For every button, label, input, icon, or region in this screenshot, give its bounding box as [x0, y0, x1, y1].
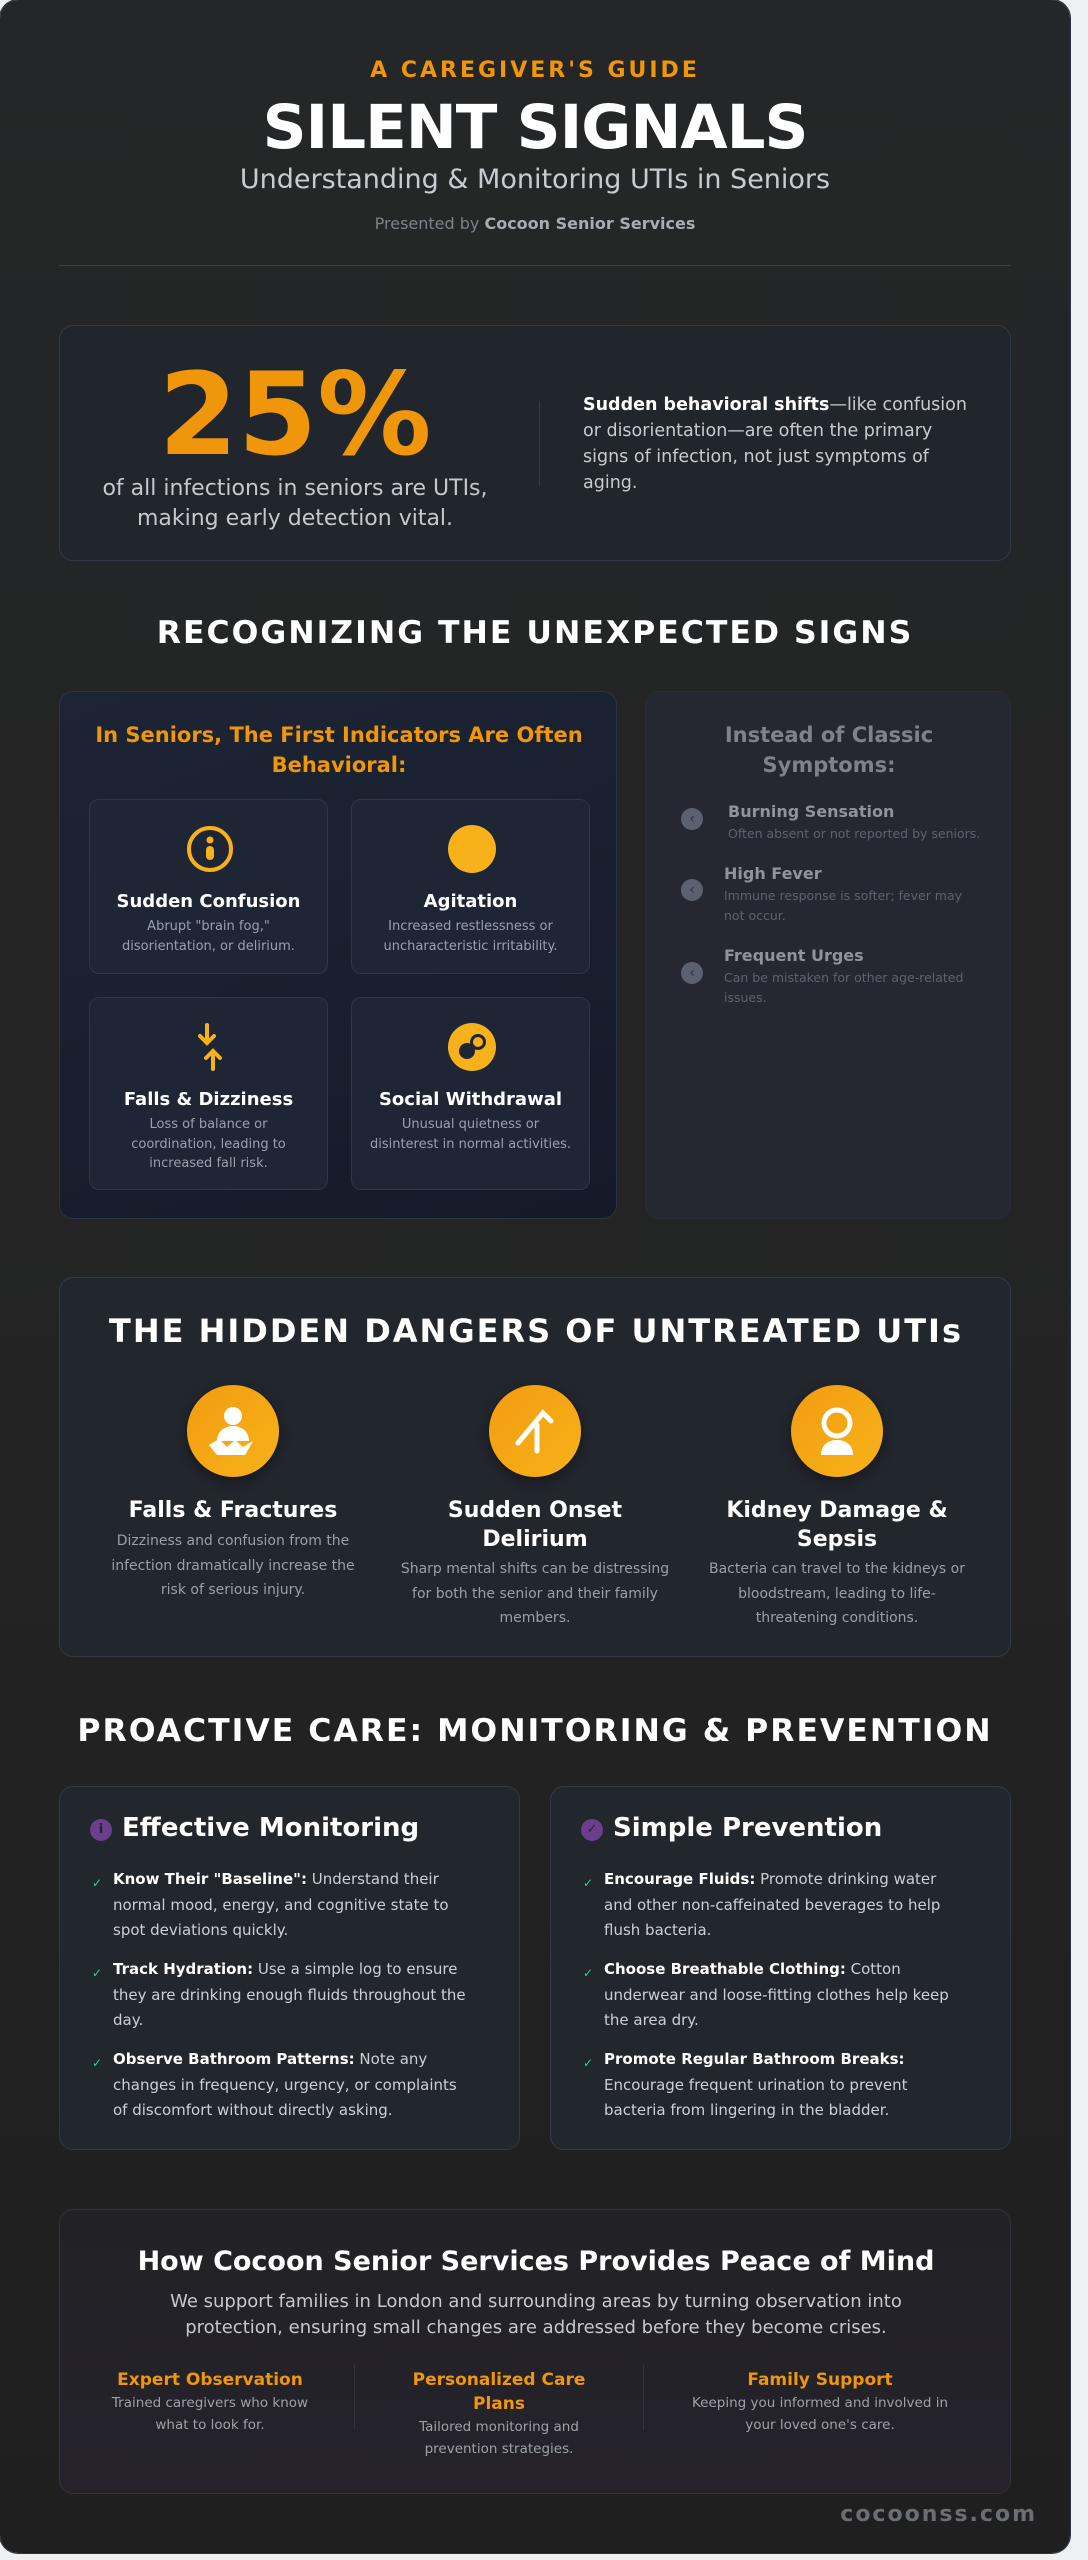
heading: How Cocoon Senior Services Provides Peace of Mind	[138, 2246, 934, 2277]
panel heading	[725, 723, 933, 777]
item: fever	[681, 864, 962, 923]
icon: info	[187, 826, 233, 872]
danger: falls: Falls & Fractures	[129, 1498, 337, 1523]
panel: monitoring: ✓	[92, 1966, 102, 1980]
panel: classic symptoms	[645, 691, 1011, 1219]
danger: kidney: Sepsis	[797, 1527, 877, 1552]
column: personalized: Plans	[473, 2394, 525, 2414]
column: family: your loved one's care.	[745, 2417, 895, 2433]
heading: Simple Prevention	[613, 1813, 882, 1843]
icon: withdrawal	[448, 1023, 496, 1071]
card: sudden confusion: disorientation, or delirium.	[122, 938, 295, 954]
item: Choose Breathable Clothing: Cotton underwear and loose-fitting clothes help keep the area dry.	[604, 1960, 949, 2029]
danger: delirium	[401, 1385, 669, 1626]
panel: prevention: ✓	[583, 1966, 593, 1980]
card: social withdrawal: disinterest in normal activities.	[370, 1136, 571, 1152]
heading: i	[99, 1822, 103, 1837]
column: expert: Expert Observation	[117, 2370, 303, 2390]
item: burning: ‹	[689, 811, 695, 827]
card: falls: increased fall risk.	[149, 1156, 268, 1171]
stat caption: of all infections in seniors are UTIs,	[102, 476, 488, 501]
panel heading	[95, 723, 583, 777]
column: personalized: Tailored monitoring and	[419, 2419, 579, 2435]
icon: arrow	[489, 1385, 581, 1477]
heading: THE HIDDEN DANGERS OF UNTREATED UTIs	[109, 1312, 963, 1350]
item: urges	[681, 946, 963, 1005]
panel: prevention: ✓	[583, 2056, 593, 2070]
panel: monitoring	[59, 1786, 520, 2150]
footer url: cocoonss.com	[840, 2502, 1037, 2527]
icon: person ring	[791, 1385, 883, 1477]
item: fever: Immune response is softer; fever may	[724, 888, 962, 903]
item: burning: Burning Sensation	[728, 802, 894, 821]
item: Encourage Fluids: Promote drinking water and other non-caffeinated beverages to help flush bacteria.	[604, 1870, 940, 1939]
danger: falls	[111, 1385, 355, 1598]
danger: delirium: Sudden Onset	[448, 1498, 622, 1523]
heading: ✓	[587, 1822, 597, 1837]
intro: protection, ensuring small changes are addressed before they become crises.	[185, 2317, 887, 2338]
icon: dot	[448, 825, 496, 873]
card: falls	[89, 997, 328, 1190]
item: urges: issues.	[724, 990, 767, 1005]
item: Promote Regular Bathroom Breaks: Encourage frequent urination to prevent bacteria from lingering in the bladder.	[604, 2050, 908, 2119]
icon: person	[187, 1385, 279, 1477]
big stat: 25%	[159, 348, 431, 481]
card: social withdrawal: Social Withdrawal	[379, 1089, 562, 1110]
card: agitation: Increased restlessness or	[388, 919, 553, 934]
column: family: Keeping you informed and involved in	[692, 2395, 948, 2411]
card: agitation: Agitation	[424, 891, 517, 912]
intro: We support families in London and surrounding areas by turning observation into	[170, 2291, 902, 2312]
card: agitation	[351, 799, 590, 974]
item: fever: not occur.	[724, 908, 786, 923]
subtitle: Understanding & Monitoring UTIs in Seniors	[240, 164, 830, 195]
panel heading: Symptoms:	[762, 753, 895, 777]
panel: monitoring: ✓	[92, 1876, 102, 1890]
danger: kidney: Bacteria can travel to the kidneys or bloodstream, leading to life-threatening conditions.	[709, 1561, 965, 1626]
stat caption	[102, 476, 488, 531]
panel heading: Behavioral:	[272, 753, 406, 777]
column: personalized	[413, 2370, 585, 2457]
column: family	[692, 2370, 948, 2433]
item: Observe Bathroom Patterns: Note any changes in frequency, urgency, or complaints of discomfort without directly asking.	[113, 2050, 457, 2119]
heading: Effective Monitoring	[122, 1813, 419, 1843]
card: social withdrawal: Unusual quietness or	[402, 1117, 539, 1132]
danger: falls: Dizziness and confusion from the infection dramatically increase the risk of serious injury.	[111, 1533, 355, 1598]
danger: kidney	[709, 1385, 965, 1626]
column: expert: what to look for.	[155, 2417, 265, 2433]
card: falls: Loss of balance or	[150, 1117, 267, 1132]
danger: delirium: Sharp mental shifts can be distressing for both the senior and their family members.	[401, 1561, 669, 1626]
panel: prevention: ✓	[583, 1876, 593, 1890]
card: falls: Falls & Dizziness	[124, 1089, 293, 1110]
stat caption: making early detection vital.	[137, 506, 453, 531]
card: falls: coordination, leading to	[131, 1136, 286, 1152]
card: sudden confusion	[89, 799, 328, 974]
card: sudden confusion: Sudden Confusion	[117, 891, 300, 912]
item: burning: Often absent or not reported by seniors.	[728, 826, 980, 841]
danger: delirium: Delirium	[482, 1527, 588, 1552]
column: expert: Trained caregivers who know	[112, 2395, 308, 2411]
item: burning	[681, 802, 980, 841]
item: Track Hydration: Use a simple log to ensure they are drinking enough fluids throughout the day.	[113, 1960, 466, 2029]
icon: arrows	[198, 1023, 222, 1071]
column: family: Family Support	[747, 2370, 893, 2390]
item: fever: High Fever	[724, 864, 822, 883]
card: sudden confusion: Abrupt "brain fog,"	[147, 919, 270, 934]
panel: prevention	[550, 1786, 1011, 2150]
presented by: Presented by Cocoon Senior Services	[375, 214, 695, 233]
panel heading: Instead of Classic	[725, 723, 933, 747]
card: social withdrawal	[351, 997, 590, 1190]
panel: hidden dangers	[59, 1277, 1011, 1657]
item: Know Their "Baseline": Understand their normal mood, energy, and cognitive state to spot deviations quickly.	[113, 1870, 449, 1939]
panel: monitoring: ✓	[92, 2056, 102, 2070]
panel: statistic	[59, 325, 1011, 561]
heading: recognizing signs: RECOGNIZING THE UNEXPECTED SIGNS	[157, 615, 913, 651]
item: urges: ‹	[689, 965, 695, 981]
heading: proactive care: PROACTIVE CARE: MONITORING & PREVENTION	[77, 1713, 993, 1749]
panel: cocoon services	[59, 2209, 1011, 2494]
panel heading: In Seniors, The First Indicators Are Often	[95, 723, 583, 747]
stat explanation: Sudden behavioral shifts—like confusion or disorientation—are often the primary signs of infection, not just symptoms of aging.	[583, 395, 967, 493]
title: SILENT SIGNALS	[263, 92, 807, 163]
header kicker: A CAREGIVER'S GUIDE	[370, 58, 700, 83]
danger: kidney: Kidney Damage &	[726, 1498, 948, 1523]
panel: behavioral indicators	[59, 691, 617, 1219]
item: urges: Frequent Urges	[724, 946, 864, 965]
item: fever: ‹	[689, 882, 695, 898]
intro	[170, 2291, 902, 2338]
column: expert	[112, 2370, 308, 2433]
card: agitation: uncharacteristic irritability.	[383, 938, 558, 954]
item: urges: Can be mistaken for other age-related	[724, 970, 963, 985]
column: personalized: Personalized Care	[413, 2370, 585, 2390]
column: personalized: prevention strategies.	[425, 2441, 573, 2457]
